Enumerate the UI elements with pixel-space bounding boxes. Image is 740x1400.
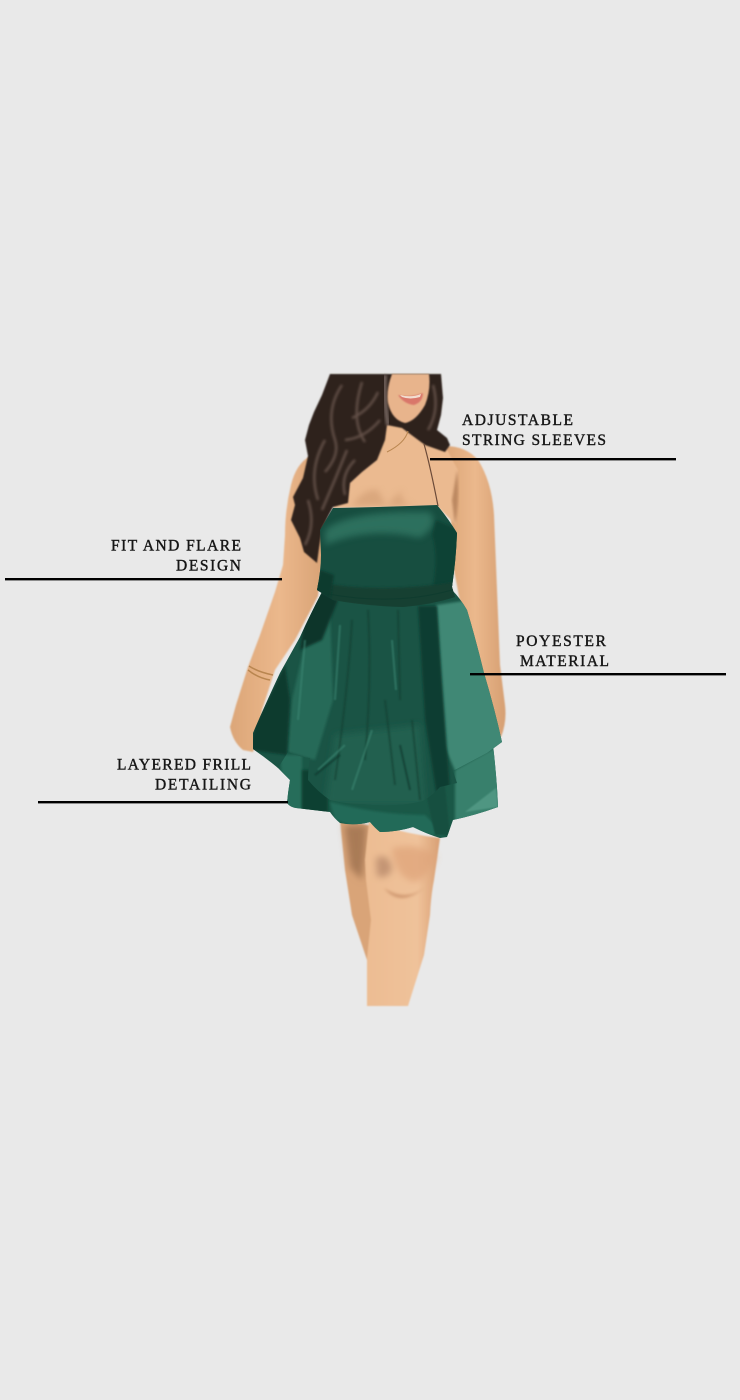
underarm shading [452,470,458,525]
bracelets [248,666,273,680]
callout: layered frill detailing [38,756,288,803]
skirt fold: dark strip [418,606,450,792]
necklace [387,431,408,452]
bodice [317,505,457,607]
skirt fold: far left dark [250,665,290,755]
legs [340,820,440,1006]
skirt fold: left panel [288,610,333,760]
face [388,374,430,423]
callout: fit and flare design: DESIGN [176,558,241,574]
callout: polyester material: POYESTER [516,633,607,650]
string strap [424,444,438,506]
callout: layered frill detailing: LAYERED FRILL [117,756,251,774]
callout: adjustable string sleeves [430,412,676,460]
callout: polyester material [470,633,726,675]
smile [398,393,423,405]
skirt fold: right panel [436,600,502,770]
waistband seam [328,590,452,599]
lower skirt tier [277,748,498,838]
skirt fold: underarm shadow [300,590,338,650]
callout: adjustable string sleeves: ADJUSTABLE [462,412,573,429]
model wearing green dress [230,374,510,1006]
callout: fit and flare design: FIT AND FLARE [111,538,241,554]
callout: adjustable string sleeves: STRING SLEEVES [462,432,606,449]
chest and neck [333,412,458,525]
infographic canvas [5,372,726,1007]
right arm [445,446,506,737]
teeth [400,394,421,398]
callout: fit and flare design [5,538,282,580]
cleavage shading [352,490,415,506]
callout: polyester material: MATERIAL [520,653,609,670]
left arm and hand [230,456,330,752]
skirt fold: lower centre [325,725,425,805]
upper skirt tier [253,592,502,801]
callout: layered frill detailing: DETAILING [155,776,251,794]
hair [291,374,450,563]
